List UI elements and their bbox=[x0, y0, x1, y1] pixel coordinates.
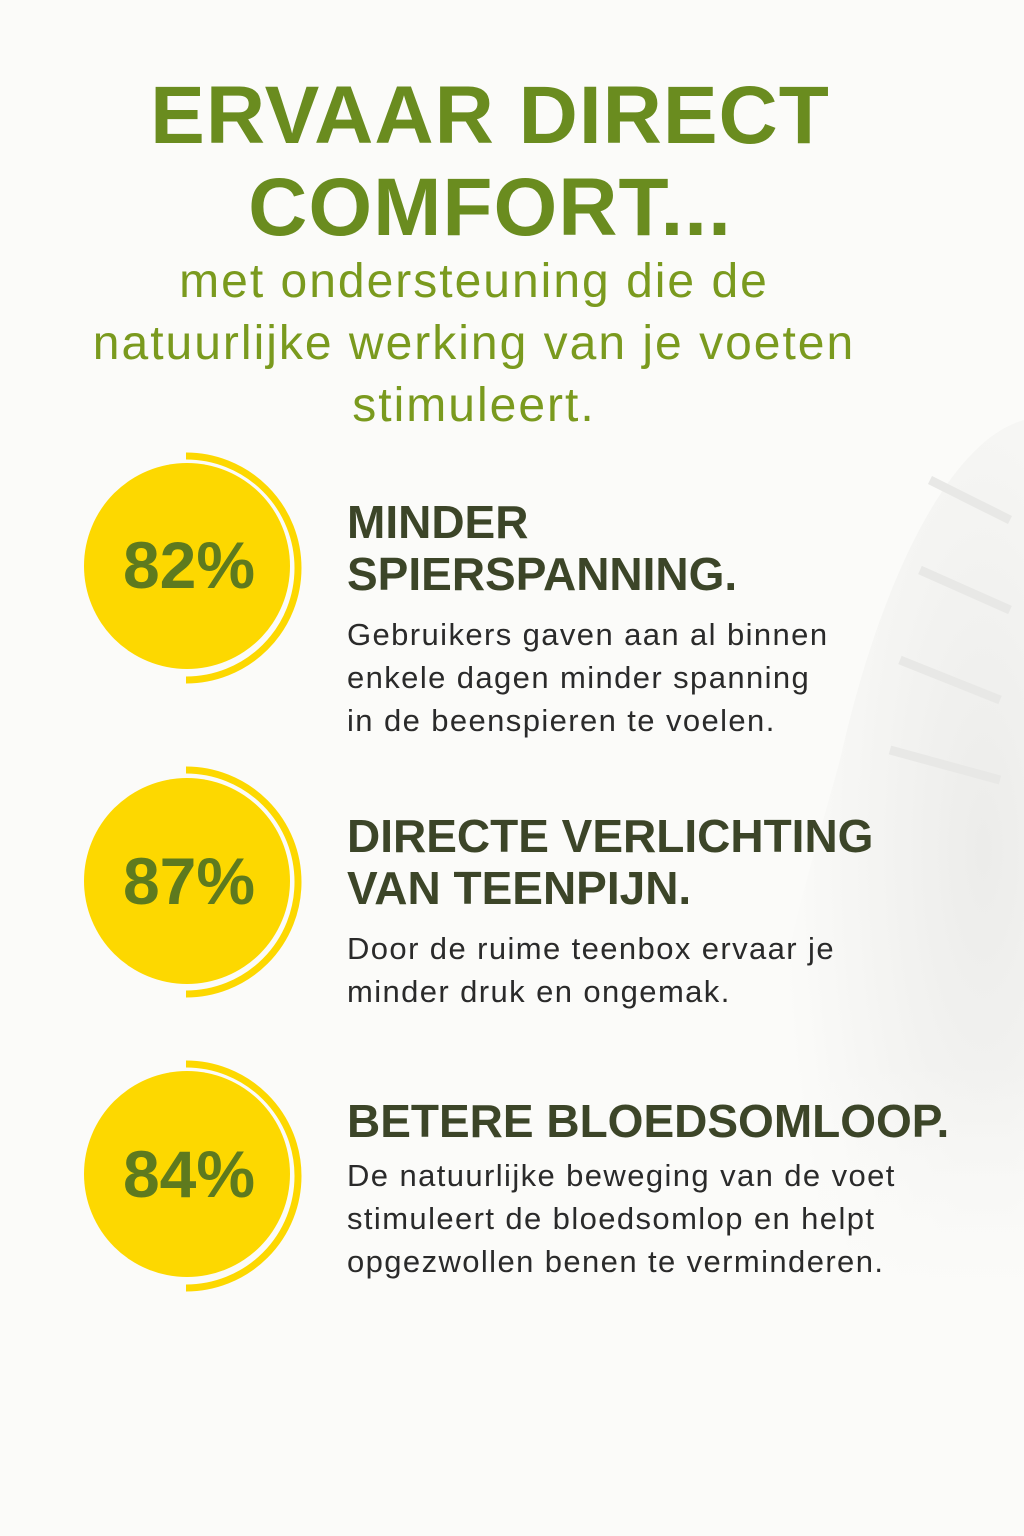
stat 1 text: Gebruikers gaven aan al binnen bbox=[347, 617, 828, 652]
stat 1 text bbox=[347, 617, 828, 738]
stat 3 text: De natuurlijke beweging van de voet bbox=[347, 1158, 896, 1193]
stat 3 text bbox=[347, 1158, 896, 1279]
stat 1 circle bbox=[84, 452, 302, 684]
stat 3 circle bbox=[84, 1060, 302, 1292]
stat 3 text: stimuleert de bloedsomlop en helpt bbox=[347, 1201, 875, 1236]
stat 3 heading: BETERE BLOEDSOMLOOP. bbox=[347, 1095, 949, 1147]
stat 2 circle bbox=[84, 766, 302, 998]
stat 3 text: opgezwollen benen te verminderen. bbox=[347, 1244, 884, 1279]
background shoe silhouette bbox=[888, 476, 1024, 1106]
stat 2 circle: 87% bbox=[123, 844, 255, 918]
stat 2 heading bbox=[347, 810, 873, 914]
stat 1 heading: SPIERSPANNING. bbox=[347, 548, 737, 600]
subtitle bbox=[93, 255, 855, 432]
stat 2 text: Door de ruime teenbox ervaar je bbox=[347, 931, 835, 966]
subtitle: met ondersteuning die de bbox=[179, 255, 769, 308]
title bbox=[150, 70, 830, 253]
title: ERVAAR DIRECT bbox=[150, 70, 830, 161]
stat 2 heading: DIRECTE VERLICHTING bbox=[347, 810, 873, 862]
stat 1 circle: 82% bbox=[123, 528, 255, 602]
stat 2 text: minder druk en ongemak. bbox=[347, 974, 731, 1009]
stat 1 text: enkele dagen minder spanning bbox=[347, 660, 810, 695]
stat 1 heading bbox=[347, 496, 737, 600]
stat 2 text bbox=[347, 931, 835, 1009]
stat 2 heading: VAN TEENPIJN. bbox=[347, 862, 691, 914]
stat 1 text: in de beenspieren te voelen. bbox=[347, 703, 776, 738]
stat 1 heading: MINDER bbox=[347, 496, 528, 548]
title: COMFORT... bbox=[248, 162, 732, 253]
subtitle: stimuleert. bbox=[352, 379, 596, 432]
subtitle: natuurlijke werking van je voeten bbox=[93, 317, 855, 370]
stat 3 circle: 84% bbox=[123, 1137, 255, 1211]
